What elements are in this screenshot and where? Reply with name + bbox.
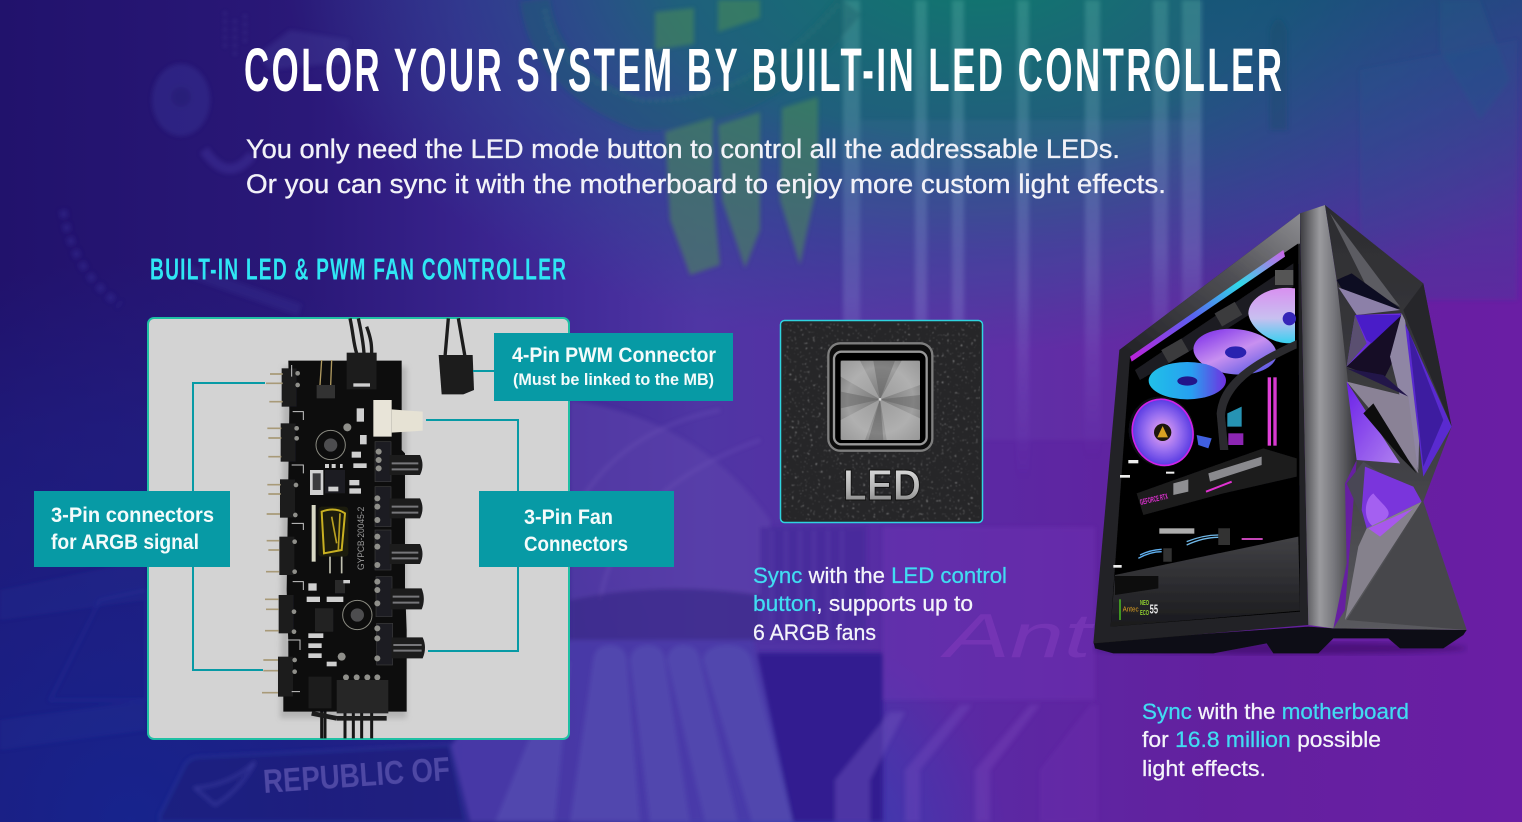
front panel [1325,205,1467,630]
case feet and base [1093,627,1467,653]
text block: LED control button sync [753,563,1007,645]
photo: PC case with ARGB fans: ECO [1140,608,1149,617]
callout: 3-pin fan connectors [479,491,674,567]
front panel pillar [1300,205,1357,628]
section heading: BUILT-IN LED & PWM FAN CONTROLLER [150,253,566,287]
callout: 4-pin PWM connector: 4-Pin PWM Connector [512,344,716,367]
text block: LED control button sync: 6 ARGB fans [753,620,876,645]
text block: LED control button sync: button, supports up to [753,591,973,616]
background: tinted motherboard photo with teal, blue and purple gradient: Ant [939,602,1095,671]
ribbed coolant tube [535,0,850,115]
motherboard, GPU and RAM: GEFORCE RTX [1139,492,1169,507]
text block: motherboard sync [1142,699,1409,781]
memory heat spreader stripes [843,0,860,500]
left board details [152,64,210,136]
ghost text on background: REPUBLIC OF [262,750,451,800]
callout: 3-pin fan connectors: 3-Pin Fan [524,505,613,529]
callout: 3-pin ARGB connectors: 3-Pin connectors [51,503,214,527]
photo: LED mode button [780,320,982,522]
subtitle text block: Or you can sync it with the motherboard to enjoy more custom light effects. [246,169,1166,199]
photo: PC case with ARGB fans: Antec [1123,605,1139,614]
motherboard, GPU and RAM [1113,340,1297,568]
side glass panel [1093,213,1308,643]
photo: PC case with ARGB fans: 55 [1150,602,1158,616]
photo: LED mode button: LED [843,461,921,510]
text block: motherboard sync: for 16.8 million possible [1142,727,1381,752]
text block: motherboard sync: light effects. [1142,756,1266,781]
fans [1120,288,1296,475]
callout: 4-pin PWM connector [494,333,733,401]
photo: LED and fan controller circuit board: GYPCB-20045-2 [356,507,366,570]
callout: 4-pin PWM connector: (Must be linked to the MB) [513,371,714,389]
connector lines [193,371,518,670]
photo: PC case with ARGB fans [1093,205,1467,654]
subtitle text block [246,134,1166,199]
PSU shroud [1111,537,1300,627]
title: COLOR YOUR SYSTEM BY BUILT-IN LED CONTROLLER [244,36,1282,105]
callout: 3-pin fan connectors: Connectors [524,532,628,556]
dark hollow and fins [757,653,883,822]
cable bundle [570,400,770,640]
text block: motherboard sync: Sync with the motherboard [1142,699,1409,724]
subtitle text block: You only need the LED mode button to control all the addressable LEDs. [246,134,1120,164]
photo: PC case with ARGB fans: NEO [1140,598,1149,607]
photo: LED and fan controller circuit board [262,318,474,738]
bottom left board relief [0,560,146,750]
panel: controller board [148,318,569,739]
text block: LED control button sync: Sync with the LED control [753,563,1007,588]
front mesh facets [1330,213,1452,620]
callout: 3-pin ARGB connectors [34,491,230,567]
callout: 3-pin ARGB connectors: for ARGB signal [51,530,199,554]
green DIMM latches [655,0,818,275]
